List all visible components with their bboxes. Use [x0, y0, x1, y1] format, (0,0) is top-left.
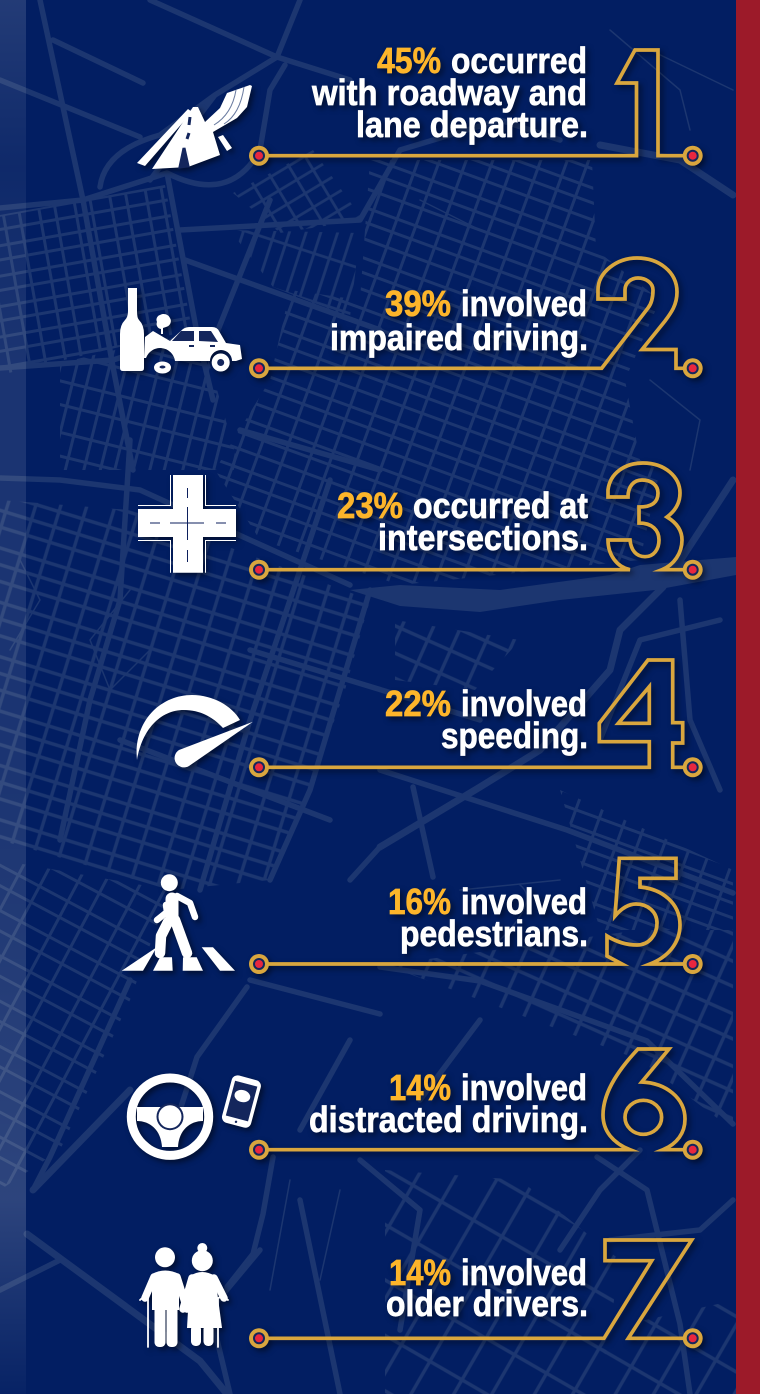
red side stripe	[736, 0, 760, 1394]
text: 45% occurred with roadway and lane departure: 45%	[377, 40, 441, 81]
item 5: pedestrians	[122, 858, 703, 974]
text: 23% occurred at intersections: 23%	[337, 485, 403, 526]
connector and numeral 4	[249, 660, 703, 777]
item 4: speeding	[137, 660, 703, 777]
item 6: distracted driving	[131, 1049, 703, 1160]
item 7: older drivers	[140, 1240, 703, 1348]
text: 14% involved distracted driving: distracted driving.	[309, 1099, 588, 1140]
text: 22% involved speeding: involved	[461, 683, 587, 724]
text: 22% involved speeding	[385, 683, 588, 756]
item 3: intersections	[138, 463, 703, 580]
connector and numeral 7	[249, 1240, 703, 1348]
icon: steering wheel and phone	[131, 1074, 262, 1155]
text: 14% involved distracted driving: 14%	[389, 1067, 451, 1108]
text: 14% involved older drivers: 14%	[389, 1252, 451, 1293]
connector and numeral 5	[249, 858, 703, 974]
icon: speedometer	[137, 695, 253, 767]
text: 39% involved impaired driving: impaired driving.	[330, 317, 588, 358]
text: 45% occurred with roadway and lane departure	[311, 40, 588, 145]
text: 45% occurred with roadway and lane departure: lane departure.	[356, 104, 588, 145]
item 1: roadway departure	[137, 40, 703, 169]
text: 39% involved impaired driving: involved	[461, 283, 587, 324]
text: 45% occurred with roadway and lane departure: with roadway and	[311, 72, 587, 113]
icon: bottle and crashed car	[120, 288, 242, 374]
text: 39% involved impaired driving	[330, 283, 588, 358]
text: 16% involved pedestrians: pedestrians.	[400, 913, 588, 954]
text: 14% involved distracted driving: involved	[461, 1067, 587, 1108]
icon: road intersection	[138, 475, 236, 573]
text: 39% involved impaired driving: 39%	[385, 283, 451, 324]
text: 23% occurred at intersections	[337, 485, 588, 558]
connector and numeral 1	[249, 50, 703, 166]
connector and numeral 2	[249, 258, 703, 378]
icon: road departure	[137, 85, 252, 169]
item 2: impaired driving	[120, 258, 703, 378]
text: 45% occurred with roadway and lane departure: occurred	[451, 40, 587, 81]
text: 23% occurred at intersections: intersections.	[378, 517, 588, 558]
text: 22% involved speeding: speeding.	[441, 715, 588, 756]
text: 14% involved older drivers	[386, 1252, 588, 1324]
text: 22% involved speeding: 22%	[385, 683, 451, 724]
connector and numeral 3	[249, 463, 703, 580]
text: 16% involved pedestrians	[388, 881, 588, 954]
text: 14% involved older drivers: involved	[461, 1252, 587, 1293]
text: 16% involved pedestrians: 16%	[388, 881, 451, 922]
text: 14% involved distracted driving	[309, 1067, 588, 1140]
text: 16% involved pedestrians: involved	[461, 881, 587, 922]
text: 14% involved older drivers: older drivers.	[386, 1283, 588, 1324]
connector and numeral 6	[249, 1049, 703, 1160]
icon: older couple with canes	[140, 1243, 228, 1347]
text: 23% occurred at intersections: occurred at	[413, 485, 588, 526]
icon: pedestrian on crosswalk	[122, 874, 235, 971]
